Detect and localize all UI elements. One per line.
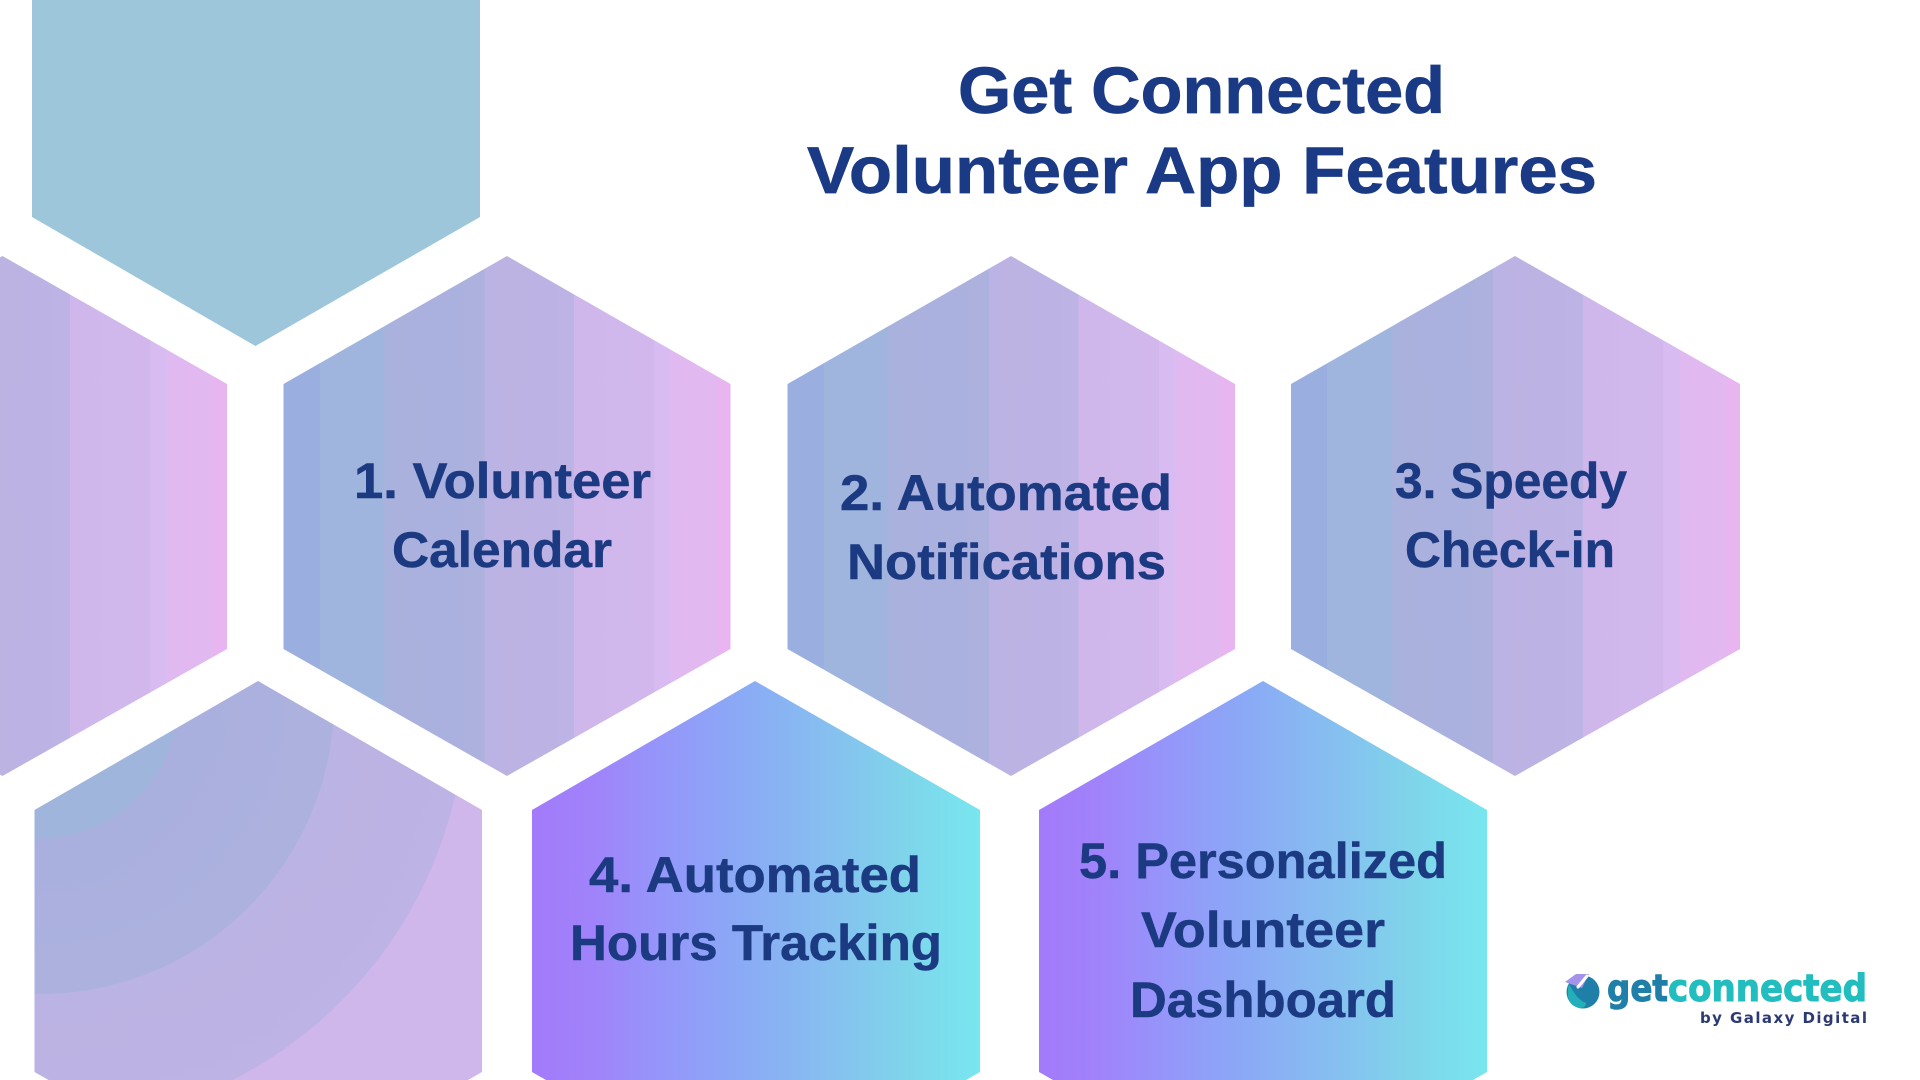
hexagon: feature 5 <box>1039 681 1487 1080</box>
hexagon: feature 1 <box>284 256 730 776</box>
hexagon: bottom-left decorative <box>34 681 482 1080</box>
panel: feature 1 <box>284 256 730 776</box>
label: Volunteer Calendar <box>354 453 651 578</box>
hexagon: feature 3 <box>1291 256 1740 776</box>
wordmark: get <box>1607 967 1668 1010</box>
label: Personalized Volunteer Dashboard: Volunteer <box>1141 902 1385 958</box>
panel: feature 5 <box>1039 681 1487 1080</box>
label: Speedy Check-in <box>1395 453 1627 578</box>
title: Volunteer App Features <box>807 133 1597 207</box>
title <box>807 53 1597 207</box>
label: Automated Notifications <box>840 465 1172 590</box>
tagline: by Galaxy Digital <box>1700 1009 1867 1027</box>
hexagon: top-left solid blue <box>32 0 480 346</box>
panel: feature 4 <box>532 681 980 1080</box>
label: Volunteer Calendar: 1. Volunteer <box>354 453 651 509</box>
label: Speedy Check-in: 3. Speedy <box>1395 453 1627 509</box>
label: Automated Notifications: Notifications <box>847 534 1166 590</box>
hexagon: left edge decorative <box>0 256 227 776</box>
panel: feature 2 <box>788 256 1235 776</box>
panel: feature 3 <box>1291 256 1740 776</box>
label: Speedy Check-in: Check-in <box>1405 522 1615 578</box>
hexagon: feature 2 <box>788 256 1235 776</box>
icon: logo mark <box>1565 974 1600 1008</box>
label: Personalized Volunteer Dashboard <box>1079 833 1447 1028</box>
hexagon: feature 4 <box>532 681 980 1080</box>
label: Automated Hours Tracking: Hours Tracking <box>570 915 942 971</box>
label: Personalized Volunteer Dashboard: Dashboard <box>1130 972 1396 1028</box>
title: Get Connected <box>958 53 1445 127</box>
label: Personalized Volunteer Dashboard: 5. Personalized <box>1079 833 1447 889</box>
label: Automated Notifications: 2. Automated <box>840 465 1172 521</box>
logo: getconnected by Galaxy Digital <box>1565 967 1867 1027</box>
label: Automated Hours Tracking <box>570 847 942 971</box>
wordmark: connected <box>1668 967 1867 1010</box>
label: Automated Hours Tracking: 4. Automated <box>589 847 921 903</box>
label: Volunteer Calendar: Calendar <box>392 522 612 578</box>
